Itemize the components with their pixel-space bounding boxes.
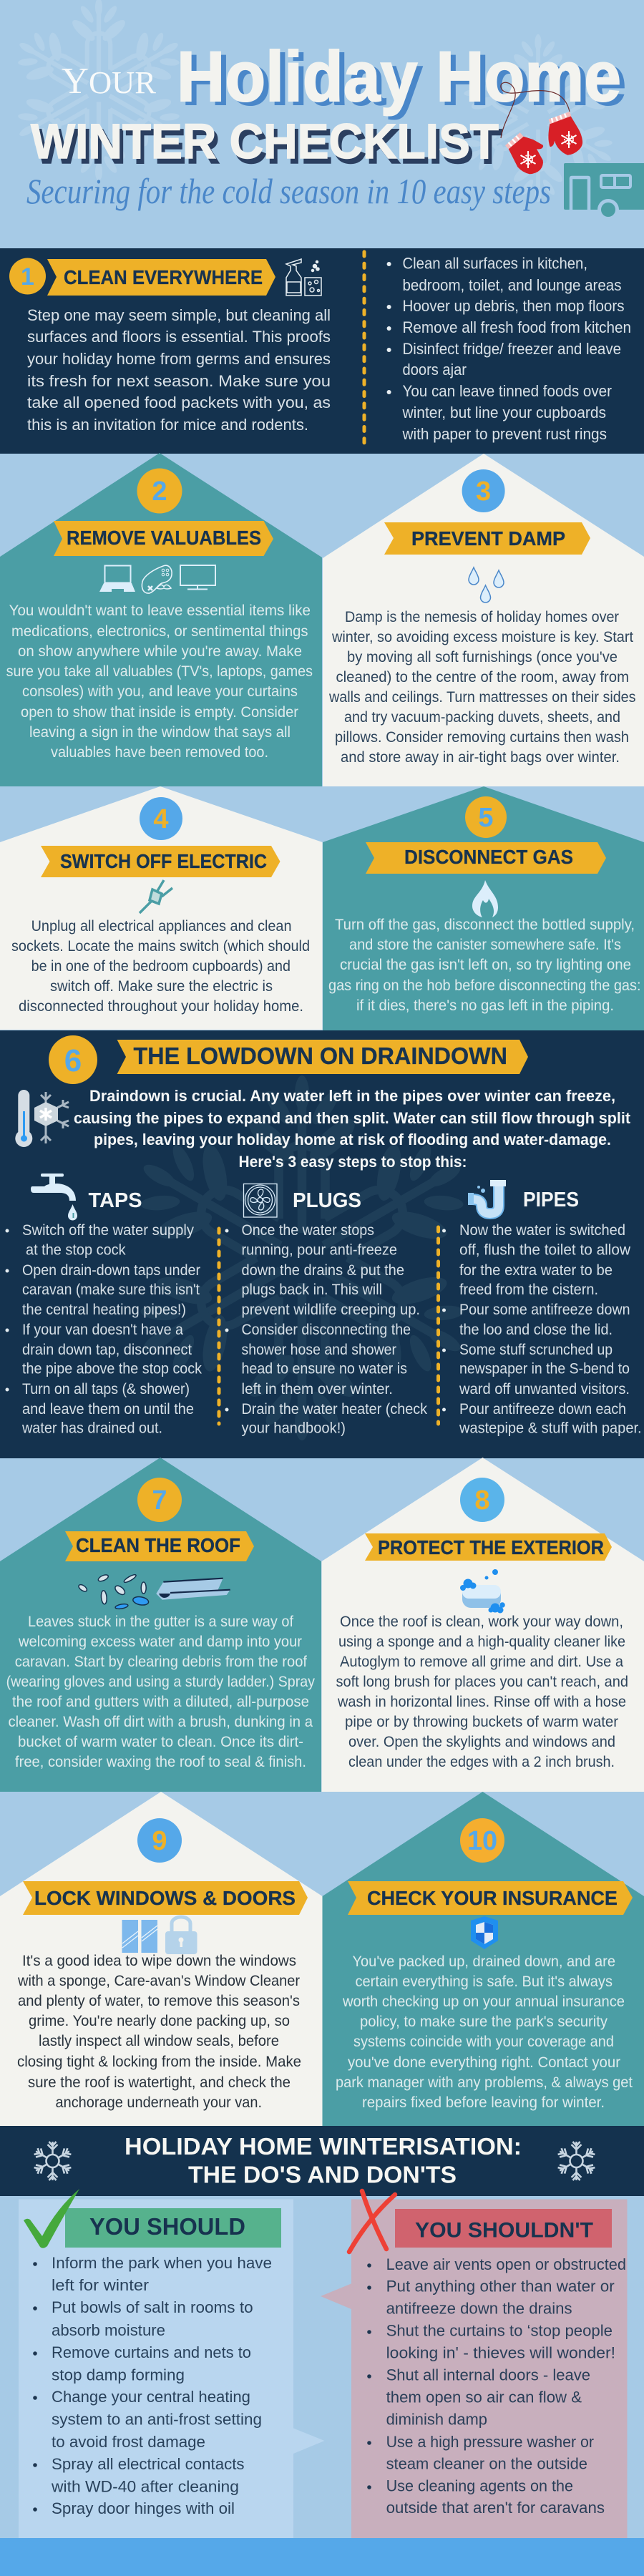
list: pipes: newspaper in the S-bend to	[459, 1361, 630, 1377]
text: step 7 paragraph: the roof and gutters with a diluted, all-purpose	[12, 1694, 309, 1710]
text: step 7 paragraph: (wearing gloves and using a sturdy ladder.) Spray	[6, 1674, 315, 1690]
list: don'ts: Shut the curtains to ‘stop people	[386, 2321, 613, 2340]
text: step 8 paragraph: Autoglym to remove all grime and dirt. Use a	[340, 1654, 623, 1670]
icon: snowflake left	[34, 2142, 72, 2180]
list: step 1 bullets: Clean all surfaces in kitchen,	[402, 255, 587, 272]
text: step 9 paragraph: lastly inspect all window seals, before	[39, 2033, 279, 2049]
ribbon heading: SWITCH OFF ELECTRIC	[60, 850, 267, 872]
ribbon heading: THE LOWDOWN ON DRAINDOWN	[133, 1043, 507, 1069]
step number 7: 7	[152, 1485, 167, 1516]
panel: step 9 lock windows and doors	[0, 1792, 322, 2126]
list: taps: If your van doesn't have a	[22, 1322, 183, 1338]
list: taps: caravan (make sure this isn't	[22, 1282, 200, 1298]
list: taps: at the stop cock	[26, 1242, 126, 1258]
list: don'ts: Put anything other than water or	[386, 2277, 615, 2296]
text: step 1 paragraph	[27, 306, 331, 434]
icon: green tick	[24, 2189, 79, 2248]
list: plugs: left in them over winter.	[242, 1381, 393, 1397]
list: do's: Remove curtains and nets to	[52, 2343, 251, 2361]
text: step 7 paragraph: cleaner. Wash off dirt with a brush, dunking in a	[9, 1714, 313, 1730]
list: step 1 bullets: bedroom, toilet, and lounge areas	[402, 276, 621, 294]
ribbon heading: LOCK WINDOWS & DOORS	[34, 1887, 296, 1909]
text: draindown intro: pipes, leaving your holiday home at risk of flooding and water-damage.	[94, 1131, 611, 1148]
text: step 2 paragraph	[6, 602, 313, 761]
text: step 9 paragraph: and plenty of water, to remove this season's	[18, 1993, 300, 2009]
list: plugs: Drain the water heater (check	[242, 1401, 427, 1418]
step number 9: 9	[152, 1826, 167, 1856]
list: pipes: freed from the cistern.	[459, 1282, 598, 1298]
list: don'ts: them open so air can flow &	[386, 2389, 582, 2406]
panel: step 8 protect the exterior	[322, 1458, 644, 1792]
text: step 1 paragraph: its fresh for next season. Make sure you	[27, 372, 331, 390]
list: don'ts: antifreeze down the drains	[386, 2300, 572, 2317]
text: step 3 paragraph: winter, so avoiding excess moisture is key. Start	[331, 629, 633, 645]
step number 4: 4	[153, 804, 169, 834]
icon: water drops	[469, 567, 504, 602]
ribbon heading	[47, 259, 275, 296]
list: step 1 bullets: Remove all fresh food from kitchen	[402, 318, 631, 336]
ribbon heading	[65, 1531, 254, 1561]
text: draindown intro: causing the pipes to expand and then split. Water can still flow through split	[74, 1109, 631, 1127]
text: step 9 paragraph: It's a good idea to wipe down the windows	[22, 1953, 296, 1969]
text: step 4 paragraph: Unplug all electrical appliances and clean	[31, 918, 291, 935]
icon: shield	[471, 1916, 498, 1949]
background snowflake left	[5, 0, 192, 180]
title: holiday home: Holiday Home	[182, 40, 626, 119]
list: pipes: ward off unwanted visitors.	[459, 1381, 630, 1397]
text: step 10 paragraph	[336, 1953, 633, 2111]
text: step 7 paragraph: welcoming excess water and damp into your	[18, 1634, 302, 1650]
banner heading: YOU SHOULD	[89, 2213, 245, 2240]
step number 9	[137, 1818, 182, 1863]
icon: tap	[31, 1174, 77, 1221]
step number 6	[49, 1035, 97, 1084]
text: step 10 paragraph: you've done everything right. Contact your	[348, 2054, 620, 2071]
list: taps: Open drain-down taps under	[22, 1262, 200, 1279]
background snowflake right	[452, 34, 625, 202]
list: do's: Change your central heating	[52, 2388, 250, 2406]
text: step 1 paragraph: surfaces and floors is essential. This proofs	[27, 328, 331, 346]
icon: spray and sponge	[286, 259, 321, 296]
banner heading	[395, 2209, 612, 2248]
text: step 10 paragraph: You've packed up, drained down, and are	[352, 1953, 615, 1970]
list: don'ts: Leave air vents open or obstructed	[386, 2255, 626, 2273]
panel: step 5 disconnect gas	[323, 786, 644, 1030]
list: do's: Spray door hinges with oil	[52, 2499, 235, 2517]
heading: plugs: PLUGS	[293, 1189, 361, 1212]
text: step 4 paragraph: switch off. Make sure the electric is	[50, 978, 273, 995]
list: step 1 bullets: winter, but line your cupboards	[402, 404, 606, 421]
text: step 4 paragraph: be in one of the bedroom cupboards) and	[31, 958, 291, 975]
text: step 5 paragraph: Turn off the gas, disconnect the bottled supply,	[335, 917, 635, 933]
icon: window and padlock	[122, 1917, 197, 1954]
text: step 5 paragraph: crucial the gas isn't left on, so try lighting one	[340, 957, 631, 973]
step number 6: 6	[64, 1043, 82, 1078]
text: step 7 paragraph: Leaves stuck in the gutter is a sure way of	[28, 1614, 293, 1630]
list: taps: Switch off the water supply	[22, 1222, 194, 1239]
text: step 8 paragraph: using a sponge and a high-quality cleaner like	[338, 1634, 625, 1650]
step number 8	[460, 1478, 504, 1522]
text: step 8 paragraph: clean under the edges with a 2 inch brush.	[348, 1754, 615, 1770]
list: taps: Turn on all taps (& shower)	[22, 1381, 190, 1397]
step number 2: 2	[152, 477, 167, 507]
icon: mittens	[501, 82, 582, 174]
list: taps: and leave them on until the	[22, 1401, 194, 1418]
ribbon heading	[366, 842, 606, 874]
step number 5: 5	[478, 803, 494, 833]
list: plugs: head to ensure no water is	[242, 1361, 407, 1377]
header	[5, 0, 644, 220]
list: plugs	[225, 1222, 427, 1437]
list: don'ts: steam cleaner on the outside	[386, 2455, 587, 2473]
banner: do's and don'ts	[0, 2126, 644, 2196]
text: step 9 paragraph: sure the roof is watertight, and check the	[28, 2074, 291, 2091]
panel: step 3 prevent damp	[323, 454, 644, 786]
text: step 2 paragraph: valuables have been removed too.	[51, 744, 268, 761]
heading: pipes: PIPES	[523, 1189, 579, 1211]
text: step 2 paragraph: leaving a sign in the window that says all	[29, 724, 291, 741]
text: step 8 paragraph: pipe or by throwing buckets of warm water	[345, 1714, 618, 1730]
title: winter checklist: WINTER CHECKLIST	[34, 119, 502, 174]
list: step 1 bullets	[387, 255, 631, 443]
text: step 10 paragraph: certain everything is safe. But it's always	[355, 1974, 613, 1990]
list: step 1 bullets: You can leave tinned foods over	[402, 382, 612, 400]
step number 1: 1	[21, 263, 34, 291]
list: step 1 bullets: Hoover up debris, then mop floors	[402, 297, 624, 315]
list: do's: Inform the park when you have	[52, 2254, 272, 2272]
text: step 10 paragraph: park manager with any problems, & always get	[336, 2074, 633, 2091]
icon: red cross	[349, 2191, 395, 2252]
step number 7	[137, 1478, 182, 1522]
text: step 4 paragraph	[11, 918, 310, 1015]
text: step 8 paragraph	[336, 1614, 628, 1770]
text: step 3 paragraph: Damp is the nemesis of holiday homes over	[345, 609, 619, 625]
list: taps: drain down tap, disconnect	[22, 1342, 192, 1358]
ribbon heading	[23, 1881, 308, 1915]
icon: gas flame	[472, 880, 498, 917]
dotted divider	[362, 252, 366, 447]
ribbon heading: CHECK YOUR INSURANCE	[367, 1887, 618, 1909]
panel: step 1 clean everywhere	[0, 248, 644, 454]
icon: sponge	[460, 1569, 505, 1613]
ribbon heading	[348, 1881, 633, 1915]
list: plugs: your handbook!)	[242, 1420, 346, 1437]
text: step 3 paragraph: and store away in air-tight bags over winter.	[341, 749, 620, 766]
panel: step 10 check your insurance	[322, 1792, 644, 2126]
text: step 8 paragraph: soft long brush for places you can't reach, and	[336, 1674, 628, 1690]
list: don'ts: Use a high pressure washer or	[386, 2433, 594, 2451]
list: don'ts	[367, 2255, 626, 2517]
heading	[125, 2133, 522, 2188]
list: don'ts: looking in' - thieves will wonder!	[386, 2344, 615, 2361]
text: step 9 paragraph: closing tight & locking from the inside. Make	[17, 2054, 301, 2070]
title word: your: YOUR	[62, 61, 157, 102]
list: pipes: off, flush the toilet to allow	[459, 1242, 631, 1258]
text: step 4 paragraph: disconnected throughout your holiday home.	[19, 998, 303, 1015]
text: step 7 paragraph: caravan. Start by clearing debris from the roof	[15, 1654, 307, 1670]
panel: step 6 the lowdown on draindown	[0, 1030, 644, 1458]
text: step 3 paragraph: by moving all soft furnishings (once you've	[347, 649, 618, 665]
list: pipes: Pour some antifreeze down	[459, 1302, 630, 1318]
ribbon heading	[41, 846, 280, 877]
text: step 2 paragraph: medications, electronics, or sentimental things	[11, 623, 308, 640]
icon: snowflake right	[557, 2142, 595, 2180]
step number 5	[465, 796, 507, 838]
list: plugs: Consider disconnecting the	[242, 1322, 411, 1338]
panel: you should	[19, 2189, 325, 2538]
list: do's: Put bowls of salt in rooms to	[52, 2298, 253, 2316]
text: step 10 paragraph: systems coincide with your coverage and	[353, 2034, 614, 2050]
list: pipes: Some stuff scrunched up	[459, 1342, 613, 1358]
ribbon heading	[384, 522, 590, 555]
step number 3	[462, 469, 505, 512]
step number 3: 3	[476, 477, 491, 507]
ribbon heading: CLEAN EVERYWHERE	[64, 266, 263, 288]
icon: thermometer and snowflake	[15, 1090, 69, 1147]
list: do's: left for winter	[52, 2276, 149, 2294]
list: don'ts: diminish damp	[386, 2411, 487, 2429]
list: don'ts: outside that aren't for caravans	[386, 2499, 605, 2517]
text: step 9 paragraph	[17, 1953, 301, 2111]
list: pipes	[442, 1222, 642, 1437]
text: step 2 paragraph: open to show that inside is empty. Consider	[21, 704, 298, 721]
step number 2	[137, 468, 182, 514]
icon: plug	[140, 880, 172, 913]
dotted divider	[436, 1227, 440, 1424]
heading: THE DO'S AND DON'TS	[188, 2161, 457, 2188]
list: plugs: prevent wildlife creeping up.	[242, 1302, 420, 1318]
list: do's: with WD-40 after cleaning	[51, 2477, 239, 2496]
dotted divider	[218, 1229, 220, 1424]
list: pipes: for the extra water to be	[459, 1262, 613, 1279]
step number 8: 8	[474, 1485, 490, 1516]
ribbon heading	[54, 521, 273, 556]
text: step 1 paragraph: your holiday home from germs and ensures	[27, 350, 331, 368]
step number 10: 10	[467, 1826, 497, 1856]
step number 1	[9, 258, 46, 295]
banner heading	[65, 2208, 281, 2248]
icon: caravan	[564, 163, 644, 220]
text: step 5 paragraph: and store the canister somewhere safe. It's	[349, 937, 621, 953]
text: step 5 paragraph: if it dies, there's no gas left in the piping.	[356, 997, 614, 1014]
text: step 1 paragraph: take all opened food packets with you, as	[27, 394, 331, 411]
text: step 3 paragraph: pillows. Consider removing curtains then wash	[335, 729, 629, 746]
ribbon heading: PREVENT DAMP	[411, 527, 565, 550]
step number 10	[460, 1818, 504, 1863]
background snowflake	[114, 1075, 489, 1440]
text: step 7 paragraph: bucket of warm water to clean. Once its dirt-	[18, 1734, 303, 1750]
heading: taps: TAPS	[89, 1189, 142, 1212]
list: taps: the central heating pipes!)	[22, 1302, 186, 1318]
text: step 1 paragraph: Step one may seem simple, but cleaning all	[27, 306, 331, 324]
ribbon heading: PROTECT THE EXTERIOR	[378, 1536, 604, 1558]
text: step 9 paragraph: grime. You're nearly done packing up, so	[29, 2013, 290, 2029]
banner heading: YOU SHOULDN'T	[415, 2218, 593, 2243]
text: step 8 paragraph: wash in horizontal lines. Rinse off with a hose	[337, 1694, 626, 1710]
list: step 1 bullets: doors ajar	[402, 361, 467, 379]
step number 4	[140, 797, 182, 840]
list: taps: the pipe above the stop cock	[22, 1361, 202, 1377]
list: plugs: shower hose and shower	[242, 1342, 396, 1358]
text: step 10 paragraph: repairs fixed before leaving for winter.	[362, 2094, 605, 2111]
ribbon heading: CLEAN THE ROOF	[76, 1534, 240, 1556]
list: do's: system to an anti-frost setting	[52, 2411, 262, 2429]
text: step 10 paragraph: worth checking up on your annual insurance	[342, 1994, 625, 2010]
text: step 9 paragraph: with a sponge, Care-avan's Window Cleaner	[17, 1973, 300, 1989]
text: step 3 paragraph: cleaned) to the centre of the room, away from	[336, 669, 629, 686]
text: draindown intro: Here's 3 easy steps to stop this:	[239, 1153, 467, 1171]
panel: step 4 switch off electric	[0, 786, 322, 1030]
list: don'ts: Shut all internal doors - leave	[386, 2366, 590, 2384]
panel: step 7 clean the roof	[0, 1458, 321, 1792]
text: step 8 paragraph: Once the roof is clean, work your way down,	[340, 1614, 623, 1630]
text: step 2 paragraph: You wouldn't want to leave essential items like	[9, 602, 311, 619]
title: winter checklist: WINTER CHECKLIST	[31, 114, 499, 169]
list: taps: water has drained out.	[21, 1420, 162, 1437]
list: don'ts: Use cleaning agents on the	[386, 2477, 573, 2495]
list: taps	[6, 1222, 202, 1437]
list: plugs: plugs back in. This will	[242, 1282, 382, 1298]
title: holiday home: Holiday Home	[177, 36, 621, 116]
list: do's	[33, 2254, 272, 2517]
ribbon heading: REMOVE VALUABLES	[67, 527, 261, 549]
panel: you shouldn't	[321, 2191, 627, 2538]
panel: step 2 remove valuables	[0, 453, 322, 786]
text: draindown intro	[74, 1087, 631, 1171]
icon: laptop, controller, monitor	[99, 565, 215, 593]
list: do's: to avoid frost damage	[52, 2433, 205, 2451]
list: do's: stop damp forming	[52, 2366, 185, 2384]
list: step 1 bullets: with paper to prevent rust rings	[402, 425, 607, 443]
text: step 5 paragraph	[328, 917, 641, 1014]
list: plugs: Once the water stops	[242, 1222, 374, 1239]
text: step 1 paragraph: this is an invitation for mice and rodents.	[27, 416, 308, 434]
text: step 2 paragraph: consoles) with you, and leave your curtains	[22, 683, 298, 700]
icon: plug vent	[243, 1184, 277, 1217]
footer band	[0, 2538, 644, 2576]
text: step 9 paragraph: anchorage underneath your van.	[56, 2094, 262, 2111]
text: step 10 paragraph: policy, to make sure the park's security	[360, 2014, 608, 2030]
list: do's: Spray all electrical contacts	[52, 2455, 245, 2473]
text: step 2 paragraph: on show anywhere while you're away. Make	[18, 643, 302, 660]
icon: u-bend pipe	[468, 1180, 506, 1214]
list: pipes: the loo and close the lid.	[459, 1322, 613, 1338]
list: do's: absorb moisture	[52, 2321, 165, 2339]
text: step 8 paragraph: over. Open the skylights and windows and	[348, 1734, 615, 1750]
heading: HOLIDAY HOME WINTERISATION:	[125, 2133, 522, 2160]
text: step 2 paragraph: sure you take all valuables (TV's, laptops, games	[6, 663, 313, 680]
text: step 7 paragraph: free, consider waxing the roof to seal & finish.	[15, 1754, 306, 1770]
list: step 1 bullets: Disinfect fridge/ freezer and leave	[402, 340, 621, 358]
text: step 3 paragraph	[328, 609, 635, 766]
text: step 7 paragraph	[6, 1614, 315, 1770]
list: plugs: down the drains & put the	[242, 1262, 404, 1279]
list: pipes: Pour antifreeze down each	[459, 1401, 626, 1418]
list: plugs: running, pour anti-freeze	[242, 1242, 397, 1258]
ribbon heading: DISCONNECT GAS	[404, 846, 573, 868]
list: pipes: Now the water is switched	[459, 1222, 625, 1239]
icon: leaves and gutter	[77, 1574, 230, 1610]
text: draindown intro: Draindown is crucial. Any water left in the pipes over winter can freeze,	[89, 1087, 615, 1105]
text: step 3 paragraph: and try vacuum-packing duvets, sheets, and	[344, 709, 620, 726]
text: step 4 paragraph: sockets. Locate the mains switch (which should	[11, 938, 310, 955]
